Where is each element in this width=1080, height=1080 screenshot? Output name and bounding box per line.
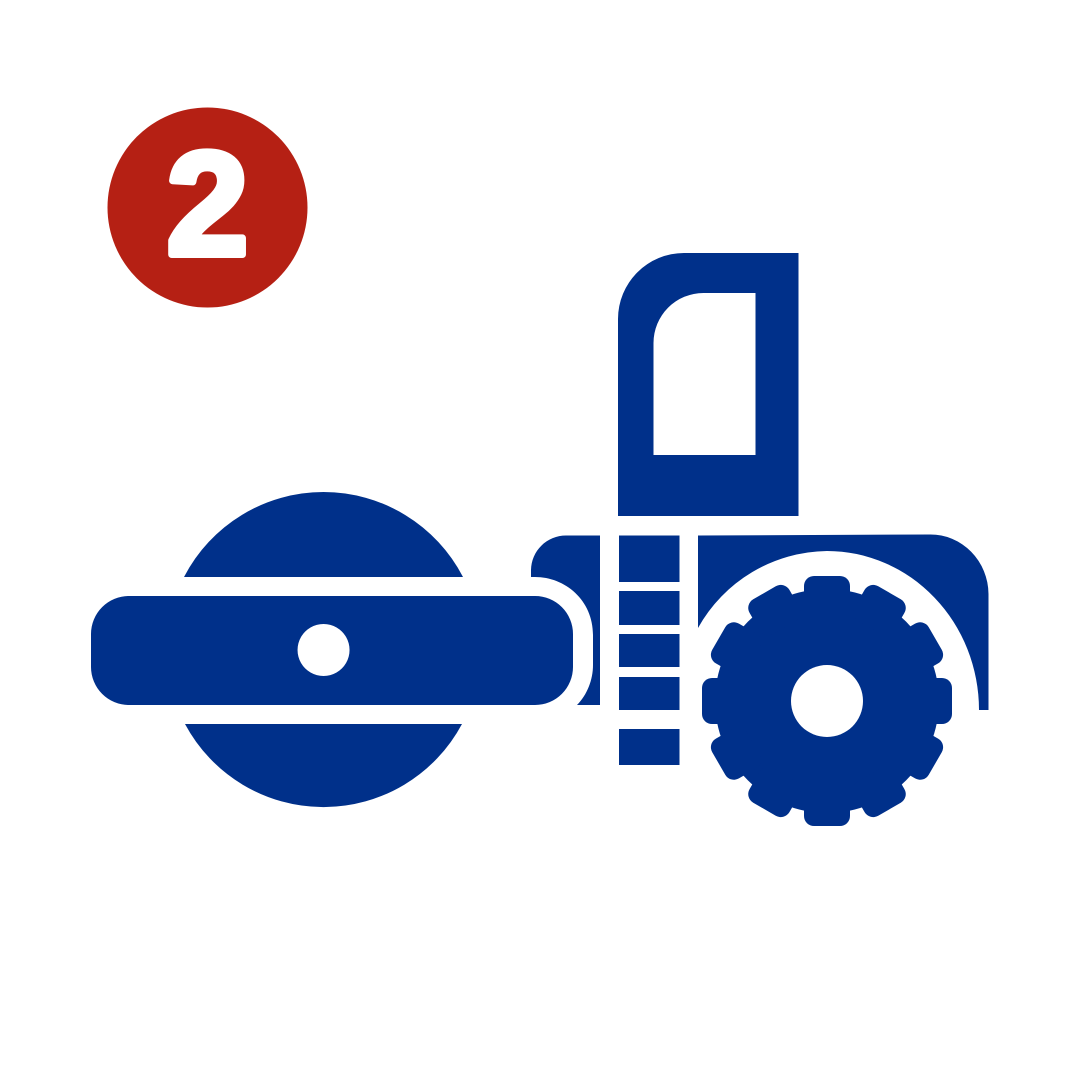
icon: stacked door panels	[619, 536, 680, 765]
icon: handle bracket	[531, 536, 600, 705]
icon: lock cylinder and handle	[91, 492, 573, 807]
step number badge	[108, 108, 308, 308]
icon: gear	[702, 576, 952, 826]
icon: door window frame	[618, 253, 798, 516]
icon: curved fender	[698, 534, 988, 710]
step number badge: 2	[167, 122, 248, 286]
